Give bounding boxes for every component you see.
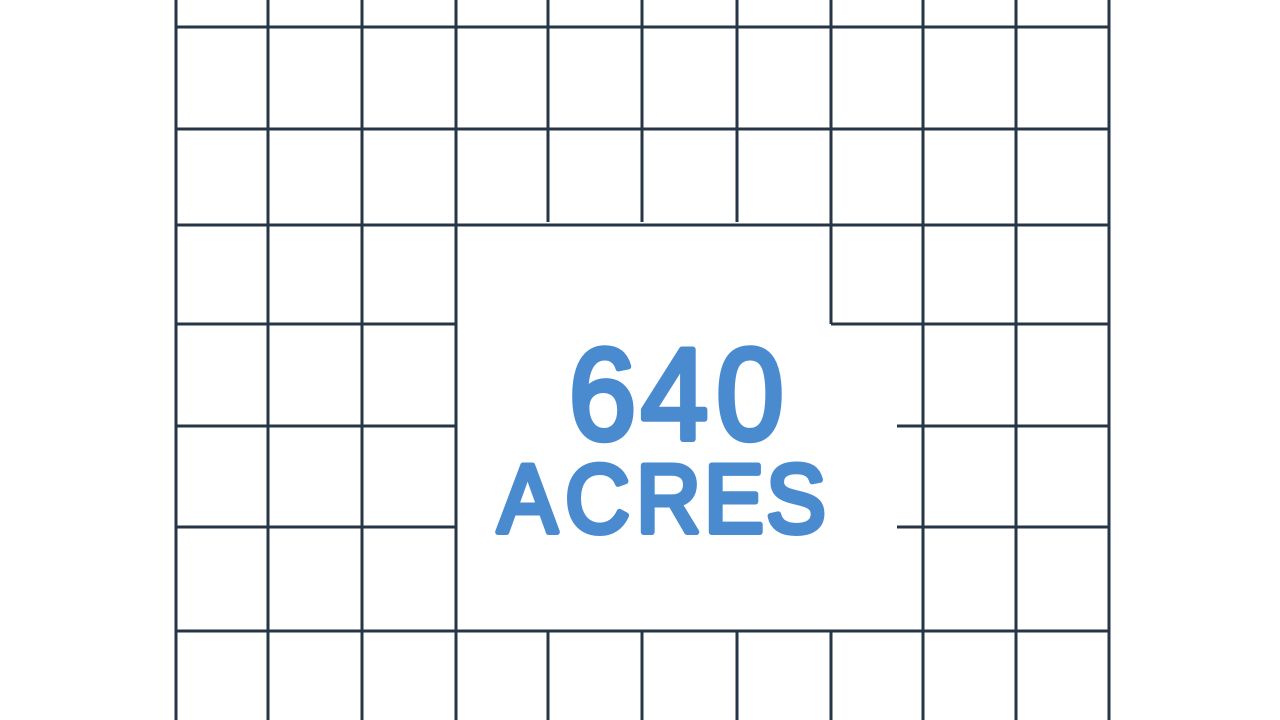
label ACRES: C	[565, 445, 630, 553]
survey grid	[176, 0, 1109, 720]
label ACRES: R	[636, 445, 701, 553]
number 640: 4	[641, 321, 708, 467]
label ACRES: A	[498, 445, 557, 553]
headline: 640 acres	[498, 321, 826, 553]
label ACRES: E	[704, 445, 764, 553]
label ACRES: S	[766, 445, 826, 553]
number 640: 0	[716, 321, 784, 467]
number 640: 6	[569, 321, 636, 467]
